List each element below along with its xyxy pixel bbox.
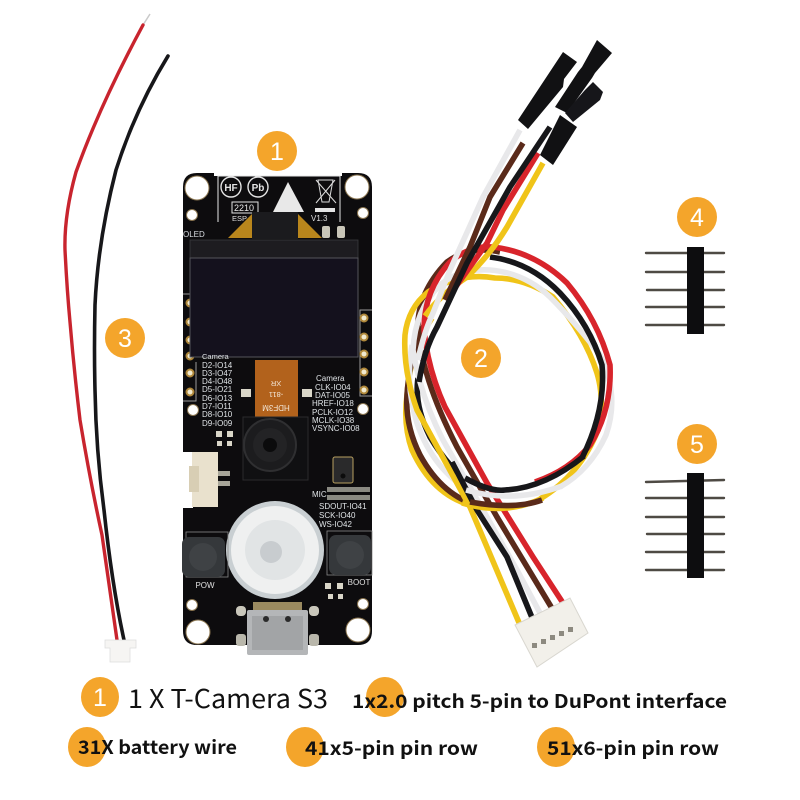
right pin labels: PCLK-IO12	[312, 408, 353, 417]
5-pin header	[646, 247, 724, 334]
right pin labels	[312, 374, 360, 433]
badge 4	[677, 197, 717, 237]
mic labels: MIC	[312, 490, 327, 499]
certification markings: ESP	[232, 214, 247, 223]
badge 4: 4	[690, 204, 704, 232]
certification markings: HF	[224, 183, 238, 194]
right pin labels: HREF-IO18	[312, 399, 354, 408]
legend item 2: 1x2.0 pitch 5-pin to DuPont interface	[352, 687, 727, 714]
legend item 5: 51x6-pin pin row	[547, 734, 719, 761]
DuPont head 4	[540, 115, 577, 165]
battery connector	[105, 640, 136, 662]
strands from connector around the top of the loop	[405, 247, 612, 625]
right pin labels: Camera	[316, 374, 345, 383]
legend item 4: 41x5-pin pin row	[305, 734, 478, 761]
DuPont head 2	[555, 40, 612, 113]
right pin labels: DAT-IO05	[315, 391, 351, 400]
DuPont head 1	[518, 52, 577, 129]
badge 2	[461, 338, 501, 378]
left-hand return strands, lowest layer	[406, 318, 480, 506]
left pin labels	[202, 352, 233, 428]
camera flex cable: HDF3M	[262, 403, 290, 412]
left pin labels: D8-IO10	[202, 410, 233, 419]
left pin labels: D5-IO21	[202, 385, 233, 394]
certification markings: Pb	[252, 183, 264, 194]
6-pin header	[646, 473, 724, 578]
legend item 5	[537, 727, 719, 767]
legend item 2	[352, 677, 727, 717]
bottom of the loop, over the crossing	[462, 456, 584, 508]
small components	[216, 389, 370, 599]
left pin labels: Camera	[202, 352, 230, 361]
POW button	[182, 532, 228, 590]
PIR sensor dome	[226, 501, 324, 599]
USB-C port	[236, 602, 319, 655]
right pin labels: MCLK-IO38	[312, 416, 355, 425]
OLED ribbon	[228, 212, 322, 239]
badge 1	[257, 131, 297, 171]
battery wire	[65, 14, 168, 662]
BOOT button: BOOT	[348, 578, 370, 587]
certification markings: V1.3	[311, 214, 328, 223]
connector cable with DuPont heads	[405, 40, 612, 667]
left pin labels: D3-IO47	[202, 369, 233, 378]
mic labels: WS-IO42	[319, 520, 352, 529]
badge 3	[105, 318, 145, 358]
certification markings	[183, 176, 340, 239]
legend	[68, 677, 727, 767]
left pin labels: D7-IO11	[202, 402, 232, 411]
left pin labels: D9-IO09	[202, 419, 233, 428]
legend item 1: 1 X T-Camera S3	[128, 679, 328, 716]
upper strands to DuPont heads	[418, 127, 550, 382]
left pin labels: D6-IO13	[202, 394, 233, 403]
side pads	[186, 300, 368, 396]
mic labels: SCK-IO40	[319, 511, 356, 520]
mic labels	[312, 490, 367, 529]
left pin labels: D2-IO14	[202, 361, 233, 370]
left pin labels: D4-IO48	[202, 377, 233, 386]
microphone	[333, 457, 353, 483]
badge 3: 3	[118, 325, 132, 353]
legend item 1: 1	[93, 684, 107, 712]
mic labels: SDOUT-IO41	[319, 502, 367, 511]
badge 2: 2	[474, 345, 488, 373]
camera flex cable	[255, 360, 298, 418]
camera flex cable: XR	[270, 379, 281, 388]
legend item 4	[286, 727, 478, 767]
legend item 3	[68, 727, 237, 767]
OLED display	[190, 240, 358, 357]
badge 5	[677, 424, 717, 464]
mounting holes	[185, 175, 370, 644]
certification markings: 2210	[234, 203, 254, 213]
legend item 3: 31X battery wire	[78, 733, 237, 760]
silkscreen frame lines	[183, 294, 372, 401]
right pin labels: VSYNC-IO08	[312, 424, 360, 433]
badge 1: 1	[270, 138, 284, 166]
BOOT button	[327, 531, 372, 587]
camera module	[243, 417, 308, 480]
badge 5: 5	[690, 431, 704, 459]
white connector	[515, 598, 588, 667]
small top-right pads	[322, 226, 345, 238]
certification markings: OLED	[183, 230, 205, 239]
battery socket	[183, 452, 230, 508]
right pin labels: CLK-IO04	[315, 383, 351, 392]
POW button: POW	[195, 581, 215, 590]
camera flex cable: -811	[269, 390, 283, 399]
DuPont head 3	[565, 82, 603, 122]
circuit board: T-Camera S3	[182, 173, 372, 655]
